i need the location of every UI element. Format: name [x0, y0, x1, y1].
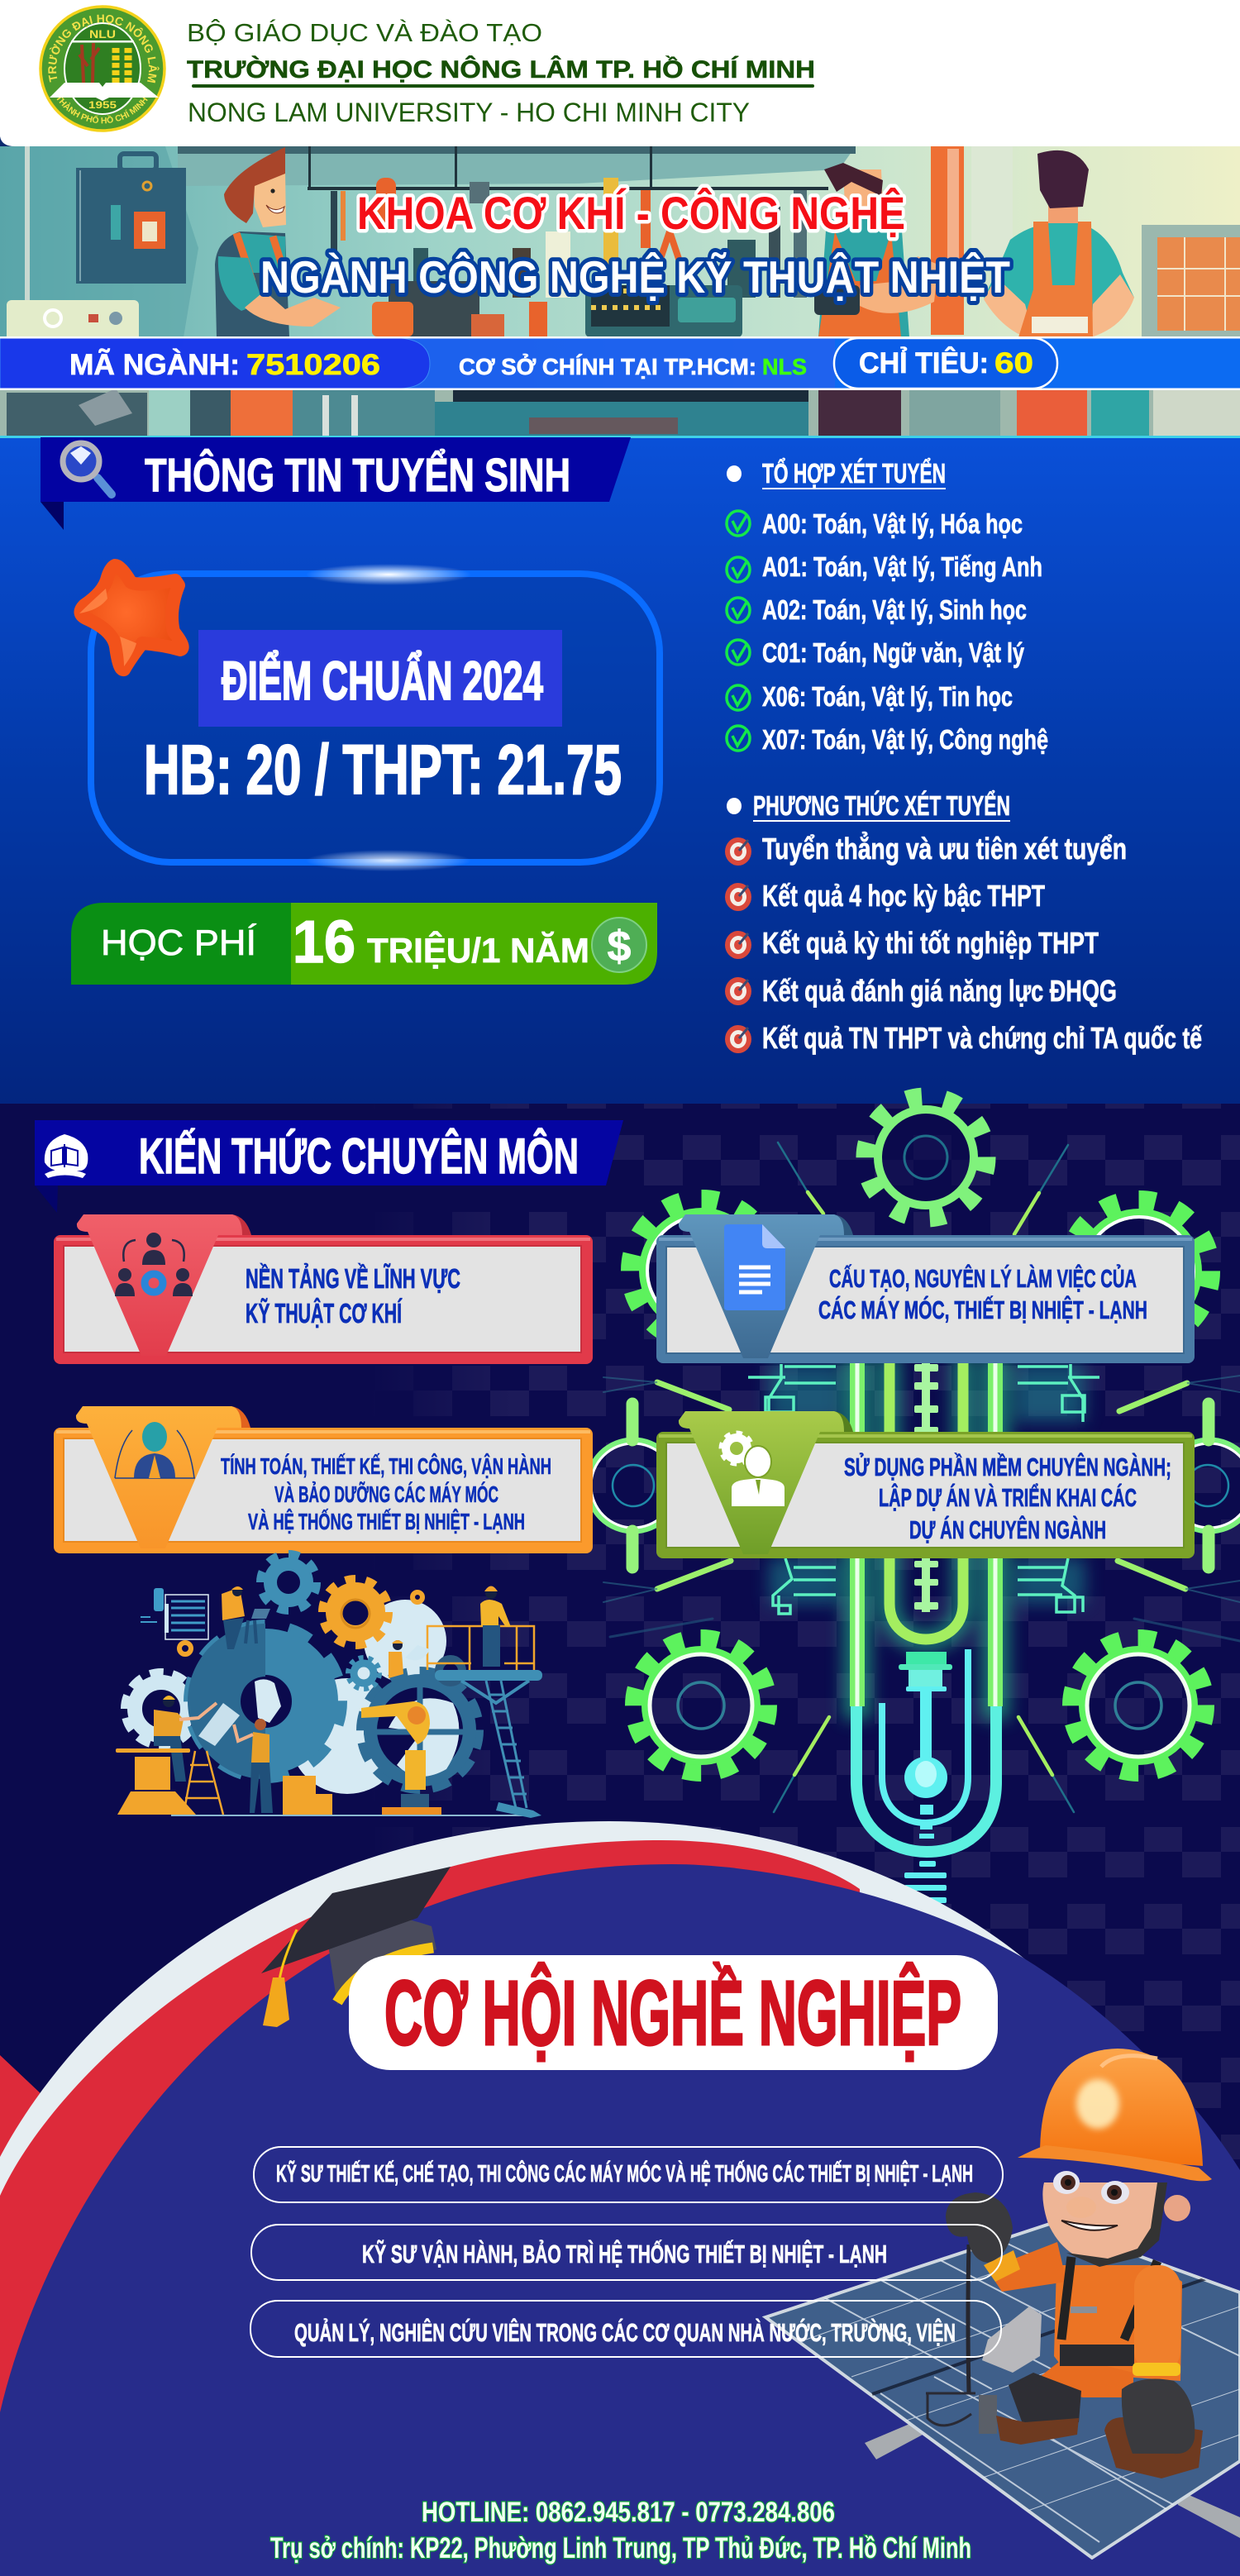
tool: stone block	[982, 2306, 1042, 2373]
tuition bar: TRIỆU/1 NĂM	[367, 930, 589, 970]
card text	[844, 1452, 1171, 1544]
benchmark label	[198, 630, 562, 727]
major code	[69, 348, 380, 381]
list: subject combinations: A00: Toán, Vật lý, Hóa học	[762, 508, 1023, 539]
card text: DỰ ÁN CHUYÊN NGÀNH	[909, 1515, 1106, 1544]
cable and connector	[926, 2244, 997, 2434]
heading ribbon: admission info	[41, 437, 631, 530]
ladder left	[184, 1751, 223, 1815]
workbench tools	[372, 281, 742, 337]
card: machine structure	[656, 1214, 1195, 1363]
major code: 7510206	[246, 349, 380, 381]
title: major: NGÀNH CÔNG NGHỆ KỸ THUẬT NHIỆT	[260, 251, 1010, 303]
gear: top blue	[262, 1556, 315, 1609]
list: subject combinations: A01: Toán, Vật lý, Tiếng Anh	[762, 551, 1042, 582]
benchmark label: ĐIỂM CHUẨN 2024	[222, 650, 543, 711]
tuition bar: 16	[293, 909, 355, 976]
gear: middle left	[588, 1404, 679, 1567]
icon: gear and user	[721, 1433, 785, 1506]
gear: lower left	[635, 1639, 767, 1772]
heading ribbon: professional knowledge: KIẾN THỨC CHUYÊN MÔN	[139, 1128, 579, 1184]
card text: VÀ BẢO DƯỠNG CÁC MÁY MÓC	[274, 1481, 498, 1507]
list: admission methods: Tuyển thẳng và ưu tiên xét tuyển	[762, 831, 1127, 866]
worker head	[1042, 2171, 1190, 2267]
major code: MÃ NGÀNH:	[69, 348, 240, 381]
card text: VÀ HỆ THỐNG THIẾT BỊ NHIỆT - LẠNH	[248, 1508, 525, 1534]
ribbon	[679, 1411, 853, 1554]
icon: university logo	[39, 5, 166, 132]
panel: admission info	[0, 436, 1240, 1106]
side circuits	[748, 1364, 1099, 1614]
quota: 60	[994, 347, 1033, 379]
list: career options	[250, 2147, 1003, 2357]
quota: CHỈ TIÊU:	[859, 346, 989, 379]
list: subject combinations	[727, 458, 1048, 755]
icon: team	[115, 1233, 193, 1296]
gear: top	[866, 1097, 986, 1218]
worker: seated left	[154, 1696, 240, 1782]
campus: NLS	[762, 354, 807, 379]
list: admission methods: Kết quả kỳ thi tốt nghiệp THPT	[762, 926, 1099, 960]
icon: dollar	[592, 918, 646, 972]
card text: TÍNH TOÁN, THIẾT KẾ, THI CÔNG, VẬN HÀNH	[221, 1453, 551, 1479]
icon: document	[724, 1224, 785, 1310]
neon inner tube	[889, 1356, 963, 1639]
tuition bar	[71, 903, 657, 985]
card: software and projects	[656, 1411, 1195, 1558]
worker: on platform	[480, 1586, 511, 1667]
list: admission methods: Kết quả đánh giá năng lực ĐHQG	[762, 974, 1117, 1008]
list: subject combinations: C01: Toán, Ngữ văn, Vật lý	[762, 637, 1024, 668]
panel: benchmark score	[79, 564, 660, 871]
card text: KỸ THUẬT CƠ KHÍ	[246, 1298, 403, 1329]
list: subject combinations: X06: Toán, Vật lý, Tin học	[762, 681, 1013, 712]
heading ribbon: admission info: THÔNG TIN TUYỂN SINH	[145, 448, 570, 502]
pencil	[496, 1802, 541, 1818]
card text	[246, 1263, 460, 1329]
career option 2	[251, 2225, 1002, 2280]
gear: upper left	[632, 1201, 771, 1340]
icon: university logo: TRƯỜNG ĐẠI HỌC NÔNG LÂM	[48, 15, 160, 83]
document sketch	[141, 1588, 208, 1639]
neon tube glow	[769, 1356, 1085, 1720]
robot arm	[361, 1701, 441, 1815]
background: dark checker section	[0, 1104, 1240, 2576]
worker: back view	[984, 150, 1134, 337]
ribbon	[76, 1406, 250, 1548]
card: design and operation	[54, 1406, 593, 1553]
gear: orange	[324, 1581, 387, 1643]
footer: hotline and address	[270, 2497, 971, 2564]
left yellow machine	[116, 1748, 196, 1815]
icon: engineer person	[115, 1422, 195, 1478]
gear: wheel right	[364, 1674, 476, 1787]
gear: upper right	[1070, 1202, 1209, 1341]
small gears	[179, 1592, 462, 1687]
heading: university name: TRƯỜNG ĐẠI HỌC NÔNG LÂM TP. HỒ CHÍ MINH	[187, 55, 815, 83]
info stripe	[0, 336, 1240, 390]
icon: university logo: 1955	[88, 99, 117, 111]
ground line	[171, 1815, 527, 1816]
ribbon	[77, 1214, 251, 1356]
list heading: TỔ HỢP XÉT TUYỂN	[762, 458, 946, 489]
card: mechanical foundations	[54, 1214, 593, 1364]
icon: book emblem	[45, 1134, 88, 1178]
banner illustration: workshop	[0, 146, 1240, 438]
icon: star	[79, 565, 183, 670]
worker: with laptop	[222, 1586, 270, 1649]
list: admission methods	[725, 790, 1203, 1055]
electrical cabinet	[76, 154, 186, 284]
window	[1142, 225, 1240, 337]
neon outer tube	[856, 1356, 996, 1852]
gear: lower right	[1072, 1639, 1204, 1772]
card text: NỀN TẢNG VỀ LĨNH VỰC	[246, 1263, 460, 1294]
center ladder	[914, 1360, 938, 1612]
worker: center	[234, 1719, 273, 1813]
worker body	[984, 2242, 1182, 2397]
tool rack	[308, 146, 828, 298]
worker left glove	[946, 2192, 1013, 2263]
light background gears	[130, 1600, 446, 1794]
neon thermal illustration	[588, 1097, 1240, 1903]
heading ribbon: professional knowledge	[35, 1120, 623, 1213]
tuition bar: HỌC PHÍ	[101, 923, 257, 963]
worker: left	[215, 147, 341, 337]
ribbon	[679, 1214, 853, 1358]
campus: CƠ SỞ CHÍNH TẠI TP.HCM:	[459, 353, 756, 379]
footer: hotline and address: HOTLINE: 0862.945.817 - 0773.284.806	[422, 2497, 835, 2528]
career option 2: KỸ SƯ VẬN HÀNH, BẢO TRÌ HỆ THỐNG THIẾT BỊ NHIỆT - LẠNH	[362, 2239, 887, 2268]
card text	[818, 1263, 1147, 1324]
header bar	[0, 0, 1240, 146]
lower bench	[0, 389, 1240, 438]
heading: english name: NONG LAM UNIVERSITY - HO CHI MINH CITY	[188, 98, 750, 127]
gear: big blue	[188, 1624, 336, 1779]
list: subject combinations: X07: Toán, Vật lý, Công nghệ	[762, 724, 1048, 755]
list: subject combinations: A02: Toán, Vật lý, Sinh học	[762, 594, 1027, 625]
list heading: PHƯƠNG THỨC XÉT TUYỂN	[753, 790, 1010, 821]
worker right glove	[1122, 2379, 1195, 2454]
benchmark score values: HB: 20 / THPT: 21.75	[144, 731, 622, 809]
heading: ministry: BỘ GIÁO DỤC VÀ ĐÀO TẠO	[187, 18, 542, 47]
icon: university logo: THÀNH PHỐ HỒ CHÍ MINH	[56, 98, 148, 124]
title: faculty: KHOA CƠ KHÍ - CÔNG NGHỆ	[357, 187, 905, 239]
thermometer	[882, 1649, 968, 1903]
icon: dollar: $	[608, 923, 632, 971]
panel: career opportunities background	[0, 1821, 1240, 2576]
worker helmet	[1018, 2049, 1212, 2181]
radial needles	[603, 1143, 1240, 1812]
gear: middle right	[1164, 1404, 1240, 1567]
career option 1	[254, 2147, 1003, 2202]
icon: graduation cap	[261, 1867, 451, 2027]
quota	[834, 338, 1057, 389]
title pill: career opportunities	[349, 1955, 998, 2070]
icon: magnifier	[63, 443, 112, 494]
footer: hotline and address: Trụ sở chính: KP22, Phường Linh Trung, TP Thủ Đức, TP. Hồ Chí Minh	[270, 2532, 971, 2564]
illustration: worker on solar panel	[765, 2049, 1240, 2558]
solar panel	[765, 2224, 1240, 2558]
worker legs and boots	[996, 2373, 1203, 2478]
list: admission methods: Kết quả 4 học kỳ bậc THPT	[762, 879, 1045, 913]
yellow boxes	[283, 1776, 332, 1815]
icon: university logo: NLU	[89, 27, 116, 41]
platform and railing	[427, 1626, 542, 1808]
illustration: engineers and gears	[116, 1556, 542, 1818]
worker: on gear	[389, 1640, 430, 1678]
card text	[221, 1453, 551, 1534]
worker: right	[814, 163, 938, 337]
career option 3	[250, 2301, 1001, 2357]
